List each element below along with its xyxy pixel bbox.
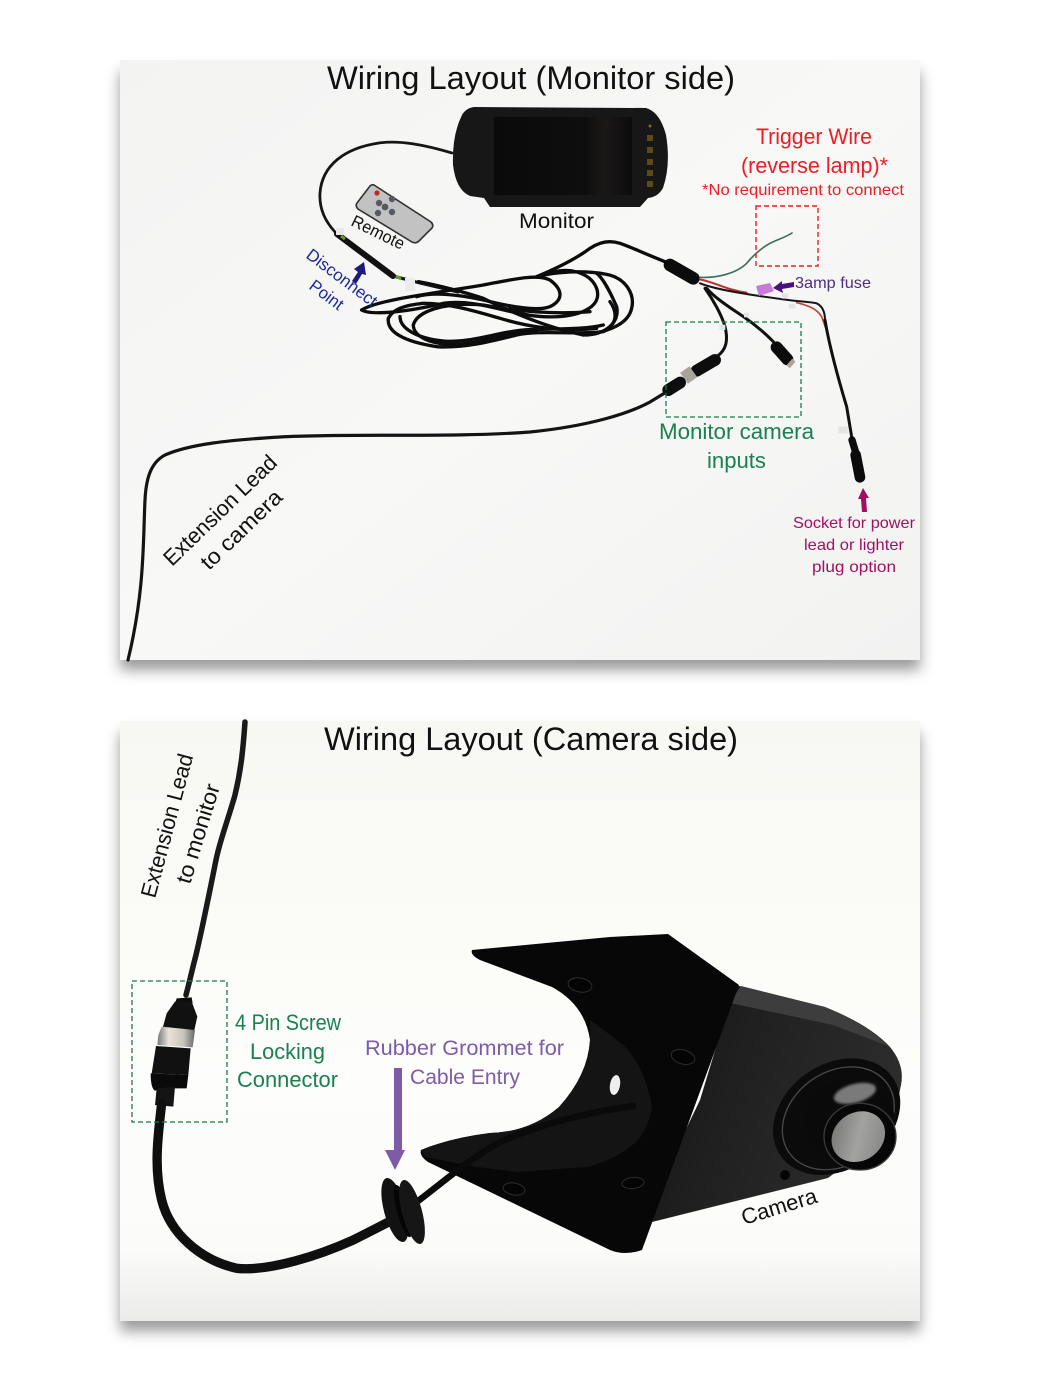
title: camera side: Wiring Layout (Camera side) [324, 721, 738, 757]
label: 4 pin screw locking connector: Locking [250, 1039, 325, 1064]
photo: mounting bracket [421, 934, 739, 1253]
box: monitor camera inputs [666, 322, 801, 417]
photo: extension cable upper [186, 722, 245, 995]
panel: camera side wiring layout [120, 721, 923, 1331]
label: extension lead to camera: Extension Lead [158, 450, 282, 571]
label: disconnect point: Disconnect [303, 245, 381, 311]
photo: extension cable lower [157, 1103, 398, 1269]
photo: 4 pin screw connector [151, 997, 197, 1107]
photo: camera housing top highlight [730, 986, 888, 1046]
label: monitor camera inputs: Monitor camera [659, 419, 815, 444]
photo: rubber grommet [376, 1175, 430, 1246]
label: remote: Remote [348, 212, 408, 254]
arrow: disconnect point [352, 262, 366, 284]
label: rubber grommet: Rubber Grommet for [365, 1037, 564, 1060]
label: extension lead to monitor [136, 751, 225, 900]
photo: extension lead to camera [128, 391, 668, 660]
arrow: fuse [773, 281, 794, 293]
photo: monitor [453, 107, 668, 207]
label: extension lead to monitor: Extension Lead [136, 751, 198, 900]
photo: coiled cable [362, 242, 665, 347]
label: monitor camera inputs [659, 419, 815, 473]
arrow: rubber grommet [385, 1068, 405, 1170]
photo: camera screw [780, 1170, 790, 1180]
box: trigger wire [756, 206, 818, 266]
label: rubber grommet [365, 1037, 564, 1089]
label: monitor: Monitor [519, 210, 594, 233]
panel: monitor side wiring layout [120, 60, 920, 670]
label: power socket: Socket for power [793, 515, 916, 532]
label: 4 pin screw locking connector: Connector [237, 1067, 338, 1092]
photo: camera lens [750, 1034, 923, 1199]
label: fuse: 3amp fuse [795, 275, 871, 292]
photo: monitor cable [320, 142, 452, 232]
title: monitor side: Wiring Layout (Monitor side) [327, 60, 735, 96]
photo: camera housing body [640, 985, 902, 1225]
label: extension lead to camera: to camera [195, 484, 288, 575]
photo: remote control [356, 185, 433, 243]
label: power socket: lead or lighter [804, 537, 905, 554]
photo: inline fuse [756, 283, 774, 296]
label: monitor camera inputs: inputs [707, 448, 766, 473]
photo: cable through bracket [410, 1106, 633, 1207]
label: rubber grommet: Cable Entry [410, 1066, 520, 1089]
label: trigger wire [702, 124, 905, 199]
label: power socket [793, 515, 916, 576]
label: camera: Camera [738, 1183, 821, 1230]
arrow: power socket [858, 488, 869, 512]
label: trigger wire: (reverse lamp)* [741, 153, 888, 178]
box: 4 pin connector [132, 981, 227, 1122]
label: 4 pin screw locking connector [235, 1010, 341, 1092]
label: disconnect point: Point [306, 276, 348, 314]
label: trigger wire: Trigger Wire [756, 124, 872, 149]
label: trigger wire: *No requirement to connect [702, 182, 905, 199]
photo: disconnect lead [336, 228, 458, 292]
photo: splitter and branch wires [668, 233, 860, 477]
label: power socket: plug option [812, 559, 896, 576]
label: extension lead to monitor: to monitor [171, 781, 225, 886]
label: 4 pin screw locking connector: 4 Pin Screw [235, 1010, 341, 1035]
